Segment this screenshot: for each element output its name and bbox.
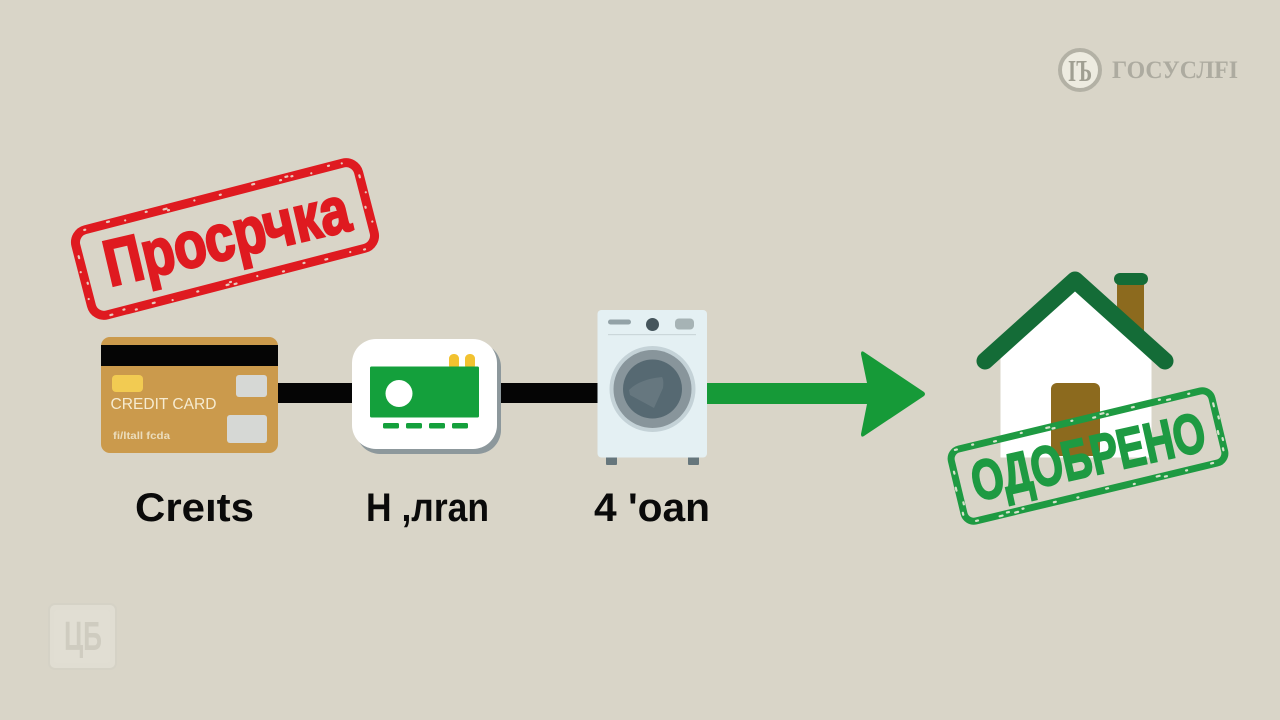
stamp: Просрчка: Просрчка xyxy=(96,172,357,300)
label: Creits: Creıts xyxy=(135,486,254,530)
logo: ГОСУСЛFI watermark: ГОСУСЛFI xyxy=(1112,57,1238,84)
icon: credit card: CREDIT CARD xyxy=(110,396,216,413)
connector: black line from card to module xyxy=(276,383,354,403)
connector: black line from module to washer xyxy=(495,383,600,403)
arrow: green forward arrow xyxy=(707,351,925,437)
icon: house xyxy=(985,273,1165,457)
label: H ,лran: H ,лran xyxy=(366,486,489,530)
icon: credit card xyxy=(101,337,278,453)
logo: ГОСУСЛFI watermark: ІЪ xyxy=(1068,53,1092,88)
logo: ГОСУСЛFI watermark xyxy=(1060,50,1238,90)
icon: green module device xyxy=(352,339,501,454)
label: 4 'oan: 4 'oan xyxy=(594,486,710,530)
icon: washing machine xyxy=(598,310,707,465)
icon: credit card: fi/ltall fcda xyxy=(113,431,171,442)
logo: ЦБ watermark xyxy=(49,604,116,669)
logo: ЦБ watermark: ЦБ xyxy=(64,613,102,659)
